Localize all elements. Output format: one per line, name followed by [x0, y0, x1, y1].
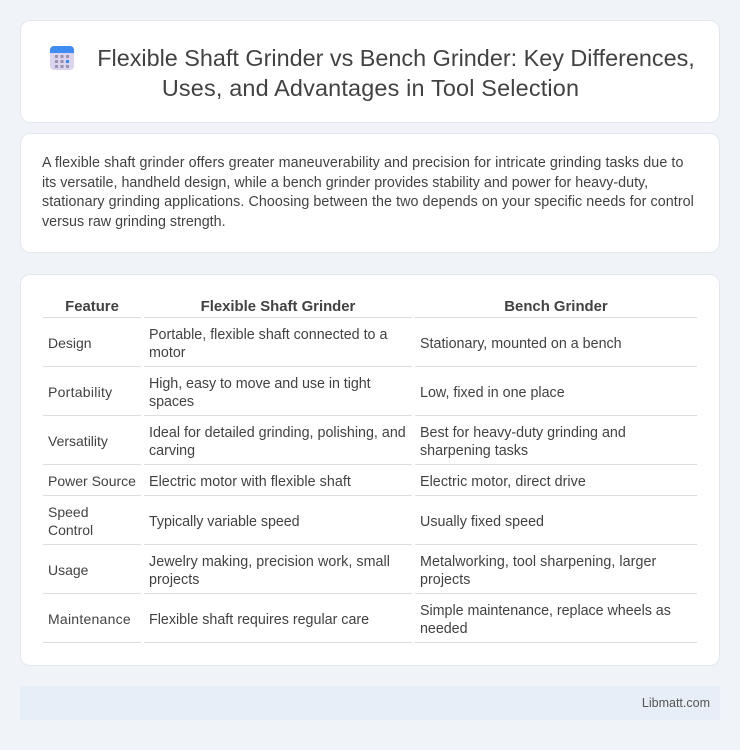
title: Uses, and Advantages in Tool Selection [162, 75, 579, 101]
row: portability: Portability [48, 384, 112, 400]
row: design [43, 327, 697, 367]
row: speed control [43, 504, 697, 545]
row: portability [43, 376, 697, 416]
row: design: Stationary, mounted on a bench [420, 336, 622, 352]
row: power source [43, 473, 697, 496]
row: usage: Jewelry making, precision work, small [149, 554, 390, 570]
row: portability: spaces [149, 394, 194, 410]
footer credit: Libmatt.com [642, 696, 710, 710]
row: versatility: Best for heavy-duty grinding and [420, 425, 626, 441]
row: speed control: Speed [48, 504, 88, 520]
row: maintenance: needed [420, 621, 468, 637]
comparison table panel [20, 274, 720, 666]
row: versatility [43, 425, 697, 465]
intro text: stationary grinding applications. Choosing between the two depends on your specific needs for control [42, 194, 694, 210]
intro text: its versatile, handheld design, while a bench grinder provides stability and power for heavy-duty, [42, 175, 648, 191]
row: speed control: Control [48, 522, 93, 538]
table header row [43, 299, 697, 318]
footer bar [20, 686, 720, 720]
title [97, 45, 695, 101]
row: versatility: carving [149, 443, 195, 459]
intro text [42, 155, 694, 230]
title: Flexible Shaft Grinder vs Bench Grinder: Key Differences, [97, 45, 695, 71]
row: maintenance: Simple maintenance, replace wheels as [420, 603, 671, 619]
row: usage: Metalworking, tool sharpening, larger [420, 554, 656, 570]
row: portability: Low, fixed in one place [420, 385, 565, 401]
row: design: Portable, flexible shaft connected to a [149, 327, 387, 343]
row: power source: Power Source [48, 473, 136, 489]
row: versatility: sharpening tasks [420, 443, 528, 459]
intro panel [20, 133, 720, 253]
column heading: feature: Feature [65, 299, 119, 315]
icon: calendar [50, 46, 74, 70]
header panel [20, 20, 720, 123]
row: speed control: Typically variable speed [149, 514, 300, 530]
row: usage: Usage [48, 562, 88, 578]
row: portability: High, easy to move and use in tight [149, 376, 371, 392]
row: usage [43, 554, 697, 594]
row: maintenance [43, 603, 697, 643]
row: maintenance: Maintenance [48, 611, 131, 627]
row: design: motor [149, 345, 186, 361]
row: speed control: Usually fixed speed [420, 514, 544, 530]
row: versatility: Versatility [48, 433, 108, 449]
row: versatility: Ideal for detailed grinding, polishing, and [149, 425, 406, 441]
row: design: Design [48, 335, 92, 351]
row: maintenance: Flexible shaft requires regular care [149, 612, 369, 628]
row: power source: Electric motor with flexible shaft [149, 474, 351, 490]
row: power source: Electric motor, direct drive [420, 474, 586, 490]
intro text: A flexible shaft grinder offers greater maneuverability and precision for intricate grinding tasks due to [42, 155, 684, 171]
row: usage: projects [149, 572, 199, 588]
row: usage: projects [420, 572, 470, 588]
intro text: versus raw grinding strength. [42, 214, 226, 230]
column heading: flexible shaft grinder: Flexible Shaft Grinder [201, 299, 355, 315]
column heading: bench grinder: Bench Grinder [504, 299, 608, 315]
